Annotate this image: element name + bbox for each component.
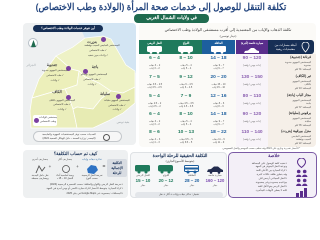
header: private car: سيارة خاصة (أجرة) [241,41,263,45]
row 5: 9 – 11 ذهاب [212,138,225,141]
row 4: المسافة: 35 كلم [295,124,311,126]
row 3: 2 – 2.5 إياب [148,105,161,108]
row 4: 7 – 9 ذهاب [213,120,224,123]
row 2: 10 – 15 إياب [212,86,225,89]
conclusion text: وقد يتجاوز طاقة عائلات كثيرة. [256,173,287,176]
formula item: other: مصاريف أخرى [32,158,48,161]
method notes: • تعريفة النقل الريفي واللواج والحافلة: حسب التسعيرة الرسمية (2024) [50,183,123,186]
table caption [164,26,292,38]
subtitle pill: في ولايات الشمال الغربي [146,16,197,21]
panel: how cost was calculated [23,150,128,198]
label: bizerte block: ✓ طب الاختصاص [89,49,107,52]
row 3: 3.5 – 4.5 إياب [179,105,193,108]
label: bizerte block: المستشفى الجامعي الحبيب بوقطفة [84,44,120,47]
row 2: بالكاف [304,83,311,86]
vehicle: louage: دينار [164,184,168,187]
formula item: other: نقل داخل المدينة ومصاريف بسيطة [32,174,48,180]
map legend [33,115,57,126]
label: kef block [49,90,75,111]
header: private car [236,40,268,54]
row 2: 4.5 – 6 إياب [180,86,192,89]
row 1: 90 – 120 [243,56,261,61]
label: kef block: ✓ ولادات [58,108,66,110]
row 3: المستشفى الجهوي [292,98,311,102]
row 1: 8 – 10 [179,56,193,61]
plus sign: + [76,164,79,169]
label: jendouba block: ✓ طب الاختصاص [46,74,64,77]
map of north-west governorates [30,23,136,128]
row 5: الحبيب بوقطفة [296,138,311,141]
formula item: other [32,157,48,180]
vehicle: private car: سيارة خاصة [208,174,222,176]
header: rural transport: النقل الريفي [147,41,162,45]
row 2: (ذات بوس / ولقه) [243,83,261,86]
formula item: transport: تعريفة النقل الرسمية حسب النوع [82,174,102,180]
method notes [46,183,123,195]
formula equal sign: = [103,164,105,170]
label: siliana block: المستشفى الجهوي سليانة [104,99,130,102]
map legend: وطب الاختصاص [40,120,56,123]
row 5: 110 – 140 [241,130,263,135]
panel: cost table [139,23,316,147]
place column background [268,54,316,147]
header: louage [170,40,202,54]
vehicle: private car [206,166,224,187]
label: bizerte block [84,37,120,57]
row 2: 2.5 – 3.5 ذهاب [147,83,162,86]
formula item: transport: تذكرة ذهاب وإياب [82,158,102,161]
row 4: 8 – 10 [179,112,193,117]
row 3: 6 – 8 إياب [213,105,224,108]
row 2: تبر (الكاف) [296,74,311,78]
label: siliana block: ✓ طب الاختصاص [108,104,126,107]
label: bizerte block: ✓ ولادات بدون تعقيد [88,54,108,57]
conclusion icons [296,158,308,197]
row 5: 18 – 22 [210,130,226,135]
row 2: 9 – 12 [179,75,193,80]
row 3: (ذات بوس / ولقه) [243,102,261,105]
row 1: فرنانة (جندوبة) [290,55,311,59]
vehicle: bus: الحافلة [188,174,196,176]
label: siliana block: سليانة [100,92,110,96]
row 4: 7 – 9 إياب [213,123,224,126]
method notes: • المسافات: محسوبة عبر Google Maps في ماي 2025 [66,192,123,195]
conclusion text: • تعتمد كلفة الوصول على المسافة [252,162,287,164]
row 1: 7 – 9 إياب [213,67,224,70]
map legend: مستشفى الولادات [39,116,57,118]
title: تكلفة التنقل للوصول إلى خدمات صحة المرأة (الولادة وطب الاختصاص) [36,2,286,13]
formula item: transport [82,158,102,180]
vehicle: bus: 20 – 28 [185,178,199,183]
row 4: المستشفى الجهوي [292,116,311,120]
row 1: (ذات بوس / ولقه) [243,64,261,67]
row 4: برقوس (سليانة) [289,111,311,115]
conclusion text: مواعيده محدودة وغير مضمونة. [255,181,287,184]
vehicle: louage: اللواج [163,174,169,176]
row 5: 5 – 6.5 إياب [180,141,192,144]
vehicle: private car: 120 – 160 [206,178,224,183]
label: siliana block [100,92,130,111]
row 1: 4 – 5 ذهاب [180,64,192,67]
header: bus [202,40,235,54]
row 4: (ذات بوس / ولقه) [243,120,261,123]
row 1: 7 – 9 ذهاب [213,64,224,67]
legend heading: map question [33,24,103,32]
label: jendouba block: المستشفى الجهوي جندوبة [42,69,68,72]
header: place column [268,40,314,54]
conclusion text: • النقل الجماعي أرخص لكن [259,177,287,180]
row 2: 10 – 15 ذهاب [212,83,225,86]
label: beja block: المستشفى الجهوي بوسالم [81,73,107,76]
label: bizerte block: بنزرت [87,40,97,44]
label: jendouba block [42,63,71,82]
heading: كيف تم حساب التكلفة؟ [54,150,97,156]
row 1: بجندوبة [304,64,311,67]
conclusion text: ونوعية النقل المتوفر في الجهة. [255,165,287,168]
row 1: المستشفى الجهوي جندوبة [285,60,311,64]
label: kef block: المستشفى الجهوي بالكاف [49,98,75,102]
icon: tunisia emblem [28,38,38,48]
row 5: المستشفى الجامعي [291,134,311,138]
table caption: تكلفة الذهاب والإياب من المعتمدية إلى أقرب مستشفى الولادة وطب الاختصاص [165,27,291,32]
row 1: 4 – 6 [149,56,160,61]
conclusion heading: خلاصة [268,153,280,158]
panel: real cost per trip [130,152,227,198]
panel subheading: (متوسط الأسبوع الجاري) [166,159,194,163]
subtitle pill [134,14,209,23]
conclusion text: لكنه لا يغطي الأوقات المتأخرة. [256,189,287,192]
row 5: 3 – 4 ذهاب [149,138,160,141]
plus sign: + [49,164,51,169]
conclusion text: • كراء السيارة من الأعلى كلفة [256,169,287,172]
label: rest of tunisia: بقية تونس [117,120,129,124]
row 5: 3 – 4 إياب [149,141,160,144]
method notes: • كراء السيارة: متوسط الأسعار لكراء سيارة تاكسي أو بوس أجرة في الجهة [46,187,123,190]
label: beja block: ✓ ولادات [88,83,96,86]
header: place column: أمثلة مسارات من معتمديات ريفية [275,42,296,51]
label: siliana block: ✓ ولادات [113,108,121,111]
row 4: 14 – 18 [210,112,226,117]
row 2: 4.5 – 6 ذهاب [179,83,193,86]
table caption: (دينار تونسي) [220,34,236,38]
panel: map [23,23,136,145]
vehicle: bus: دينار [190,184,194,187]
header: louage: اللواج [183,41,189,45]
vehicle: louage: 12 – 20 [159,178,173,183]
label: jendouba block: ✓ ولادات [51,79,59,82]
note bar: تشمل: تذاكر ذهاب وإياب + أكل + نقل [159,193,199,196]
row 2: المسافة: 43 كلم [295,86,311,90]
row 1: 4 – 5 إياب [181,67,191,70]
row 2: المستشفى الجهوي [292,80,311,82]
label: beja block [80,64,107,86]
vehicle: private car: دينار [213,184,217,187]
row 3: بباجة [306,102,311,105]
row 3: 6 – 8 ذهاب [213,102,224,105]
map source note: (المصدر: وزارة الصحة – دليل الهياكل الصحية 2024) [42,136,96,140]
conclusion text: • النقل الريفي هو الأقل كلفة [258,185,287,188]
row 2 [147,74,311,90]
row 4: 4 – 5 إياب [181,123,191,126]
vehicle: bus [184,165,200,187]
table footnote: * الأسعار تقديرية وتاريخ على 2024 وقد تختلف حسب الموسم والنقل الخصوصي. [222,146,300,150]
row 5 [149,129,311,145]
row 5: المسافة: 22 كلم [295,142,311,144]
map source note: الخدمات حسب توفر المستشفيات الجهوية والجامعية [42,132,96,136]
formula item: food: مصاريف أكل [58,158,72,161]
panel: conclusion [228,152,317,198]
label: beja block: ✓ طب الاختصاص [83,78,101,81]
formula item: food: وجبة أساسية أثناء التنقل 10 – 15 د [56,174,74,180]
row 3: المسافة: 37 كلم [295,106,311,108]
row 5: (ذات بوس / ولقه) [243,138,261,141]
row 3 [148,93,311,109]
row 1: 2 – 3 ذهاب [149,64,160,67]
vehicle: rural transport: النقل الريفي [136,174,150,176]
row 5: 10 – 13 [178,130,194,135]
formula item: food [56,157,74,180]
row 3: 12 – 16 [210,94,226,99]
formula box: total: التكلفة الإجمالية للرحلة [111,161,123,175]
header: bus: الحافلة [214,41,223,45]
row 1: 14 – 18 [210,56,226,61]
row 4: سليانة [305,120,311,123]
formula box: total [107,159,127,177]
header: rural transport [139,40,170,54]
panel heading: التكلفة الحقيقية للرحلة الواحدة [153,153,207,158]
row 1: المسافة: 31 كلم [295,68,311,70]
label: kef block: ✓ طب الاختصاص [53,103,71,106]
row 4: 4 – 6 [149,112,160,117]
row 2: 130 – 150 [241,75,263,80]
car column background [236,54,268,147]
label: algeria: الجزائر [26,63,36,67]
row 3: 3.5 – 4.5 ذهاب [178,102,194,105]
label: kef block: الكاف [52,90,62,94]
label: jendouba block: جندوبة [47,63,57,67]
row 3: مجاز الباب (باجة) [287,93,311,97]
map source note [33,131,122,142]
row 3: 4 – 5 [149,94,160,99]
row 5: 9 – 11 إياب [213,141,224,144]
row 5: منزل بورقيبة (بنزرت) [281,129,311,133]
row 5: 6 – 8 [149,130,160,135]
row 4: 2 – 3 إياب [149,123,160,126]
row 3: 2 – 2.5 ذهاب [148,102,161,105]
row 5: 5 – 6.5 ذهاب [179,138,193,141]
row 2: 20 – 20 [210,75,226,80]
row 1 [149,55,311,71]
row 3: 7 – 9 [181,94,191,99]
vehicle: rural transport: دينار [141,184,145,187]
vehicle: rural transport [135,165,150,187]
vehicle: louage [158,165,174,187]
row 2: 2.5 – 3.5 إياب [147,86,162,89]
vehicle: rural transport: 10 – 15 [136,178,150,183]
label: beja block: باجة [92,65,98,69]
row 4: 4 – 5 ذهاب [180,120,192,123]
row 4: 90 – 120 [243,112,261,117]
row 4 [149,111,311,127]
row 4: 2 – 3 ذهاب [149,120,160,123]
row 1: 2 – 3 إياب [149,67,160,70]
note bar [135,192,223,198]
legend heading: map question: أين تتوفر خدمات الولادة وطب الاختصاص؟ [41,26,95,30]
conclusion text [252,162,287,192]
row 3: 80 – 110 [243,94,261,99]
row 2: 5 – 7 [149,75,160,80]
